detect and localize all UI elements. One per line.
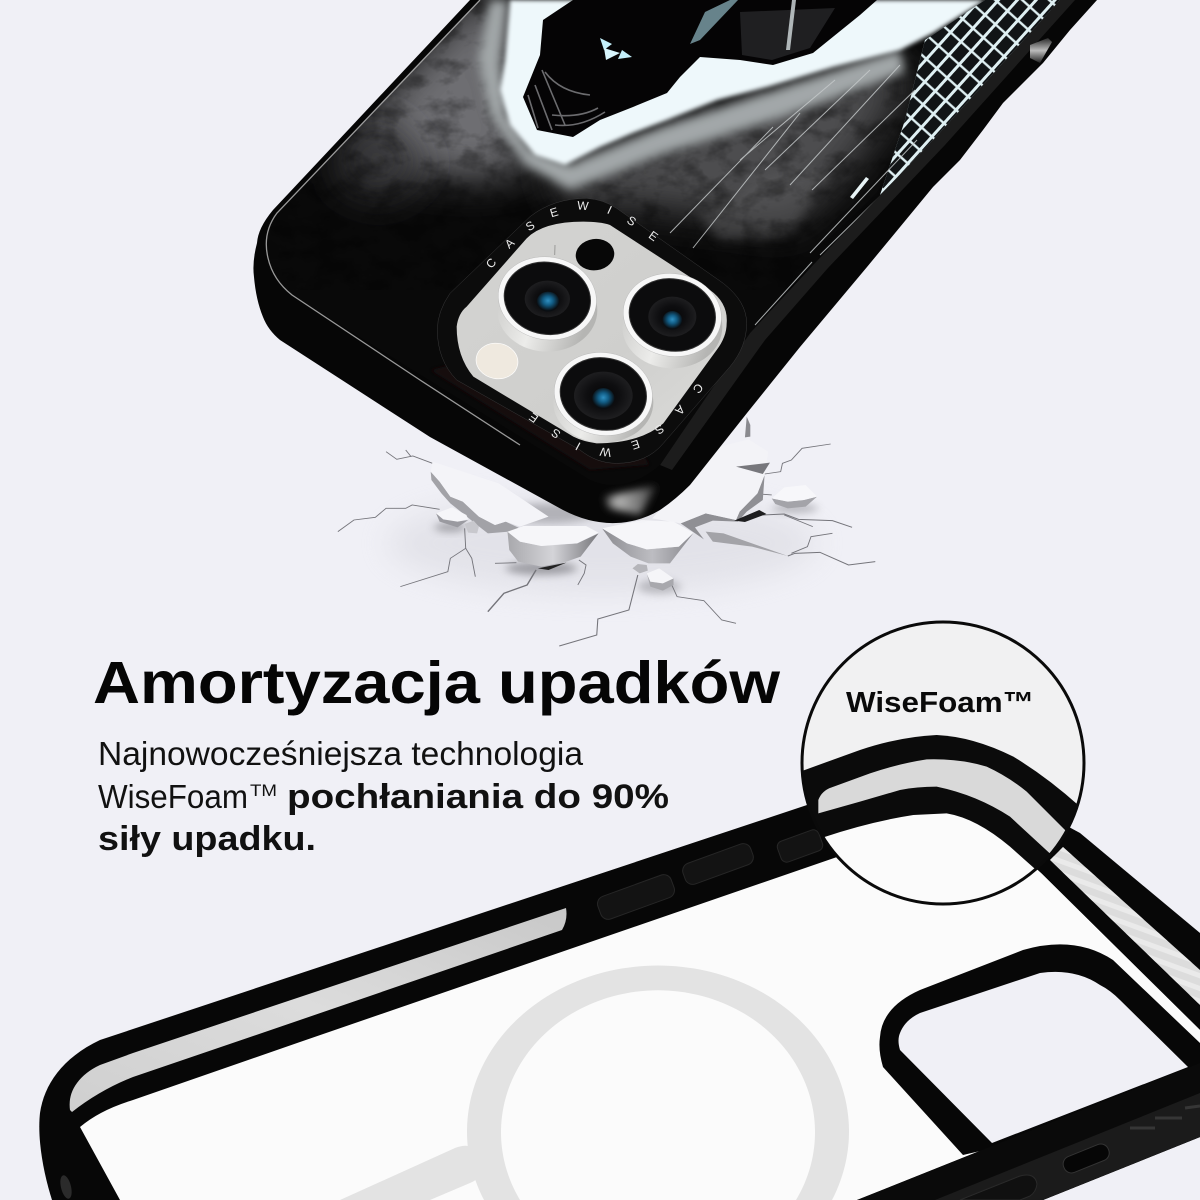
circle outline bbox=[802, 622, 1084, 904]
case frame bbox=[39, 760, 1200, 1200]
phone with black case (top) bbox=[250, 0, 1097, 523]
clear case (bottom) bbox=[39, 760, 1200, 1200]
description text: siły upadku. bbox=[98, 820, 316, 858]
artwork: tail stripes bbox=[528, 70, 605, 130]
artwork: grey smoke bbox=[360, 0, 530, 178]
description text: TM bbox=[250, 781, 277, 800]
artwork: burst halo bbox=[478, 0, 905, 190]
camera cutout frame bbox=[879, 944, 1200, 1155]
action port bbox=[1061, 1142, 1112, 1175]
lidar hole bbox=[574, 236, 616, 273]
rock: middle left bbox=[507, 532, 599, 567]
flash bbox=[473, 340, 521, 382]
side button bbox=[1030, 38, 1052, 63]
side button 2 bbox=[680, 841, 756, 887]
description text bbox=[98, 735, 669, 858]
description text: WiseFoam bbox=[98, 778, 248, 815]
cracked wall impact bbox=[338, 417, 875, 646]
WiseFoam label: WiseFoam™ bbox=[846, 687, 1034, 719]
artwork: noise bbox=[346, 0, 911, 240]
bottom button bbox=[960, 1175, 1037, 1200]
side button 1 bbox=[595, 872, 677, 922]
side button 3 bbox=[776, 828, 824, 864]
description text: Najnowocześniejsza technologia bbox=[98, 735, 584, 772]
artwork: dark figure bbox=[523, 0, 877, 137]
slab: right bbox=[681, 475, 765, 539]
lens 2 bbox=[617, 266, 728, 368]
corner port bbox=[58, 1174, 74, 1200]
case body bbox=[253, 0, 1097, 523]
case inner glossy edge bbox=[266, 0, 520, 445]
artwork: white burst bbox=[500, 0, 985, 165]
small rocks bbox=[436, 513, 468, 527]
clear back panel bbox=[80, 800, 1200, 1200]
lens 3 bbox=[548, 345, 659, 443]
bottom gloss highlight bbox=[604, 485, 658, 515]
lower frame band bbox=[857, 1063, 1200, 1200]
lower band sheen bbox=[935, 1093, 1200, 1200]
WiseFoam magnifier bbox=[800, 620, 1086, 906]
magnetic ring bbox=[467, 966, 849, 1200]
lens 1 bbox=[492, 249, 603, 352]
foam slot left bbox=[70, 908, 567, 1112]
rock: middle right bbox=[602, 528, 693, 563]
crack lines bbox=[338, 444, 875, 646]
title: Amortyzacja upadków bbox=[93, 650, 780, 716]
artwork bbox=[320, 0, 1060, 471]
camera cutout opening bbox=[898, 972, 1188, 1143]
artwork: reddish lower glow bbox=[430, 365, 650, 470]
case side sheen bbox=[660, 0, 1075, 470]
camera ring bbox=[437, 198, 747, 463]
magnet alignment bar bbox=[340, 1146, 484, 1200]
foam slot right bbox=[1050, 847, 1200, 1005]
slab: left bbox=[431, 472, 520, 533]
WiseFoam circle fill bbox=[802, 622, 1084, 904]
ring text bottom: CASEWISE bbox=[528, 384, 702, 457]
mic bbox=[553, 245, 556, 255]
artwork: figure eyes bbox=[600, 38, 612, 50]
artwork: thin light lines bbox=[670, 65, 927, 332]
inner slot highlight right bbox=[1040, 872, 1200, 1043]
description text: pochłaniania do 90% bbox=[287, 778, 669, 816]
camera bump bbox=[437, 198, 747, 464]
magnified case corner bbox=[804, 735, 1076, 868]
camera plate bbox=[457, 222, 727, 443]
ring text top: CASEWISE bbox=[486, 201, 658, 268]
band streaks bbox=[1130, 1106, 1200, 1128]
artwork: fingerprint grid bbox=[880, 0, 1060, 195]
